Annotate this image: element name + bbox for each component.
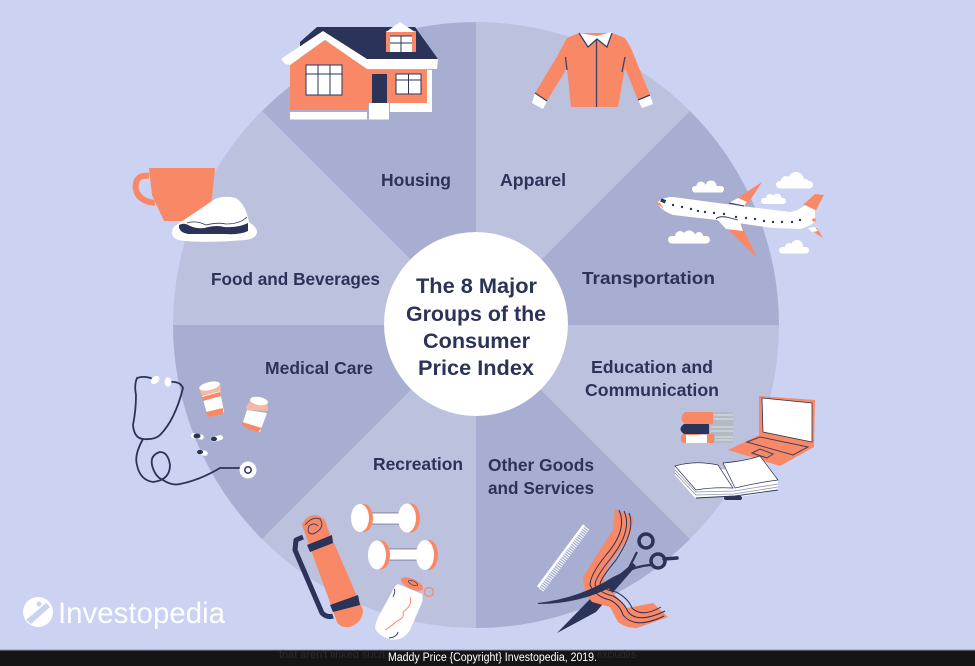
- label: Transportation: Transportation: [582, 268, 715, 288]
- icon: shirt: [532, 32, 653, 109]
- footer caption bar: [0, 649, 975, 666]
- icon: stethoscope chest piece: [240, 462, 256, 478]
- label: Food and Beverages: Food and Beverages: [211, 269, 380, 289]
- icon: stethoscope: [133, 376, 242, 484]
- centre circle with title: [384, 232, 568, 416]
- icon: hair strand and scissors: [538, 509, 677, 633]
- centre circle with title: Price Index: [418, 357, 534, 380]
- label: Medical Care: Medical Care: [265, 358, 373, 378]
- icon: coffee cup: [136, 168, 215, 221]
- label: Apparel: Apparel: [500, 170, 566, 190]
- icon: airplane with clouds: [655, 172, 824, 258]
- pie wheel of eight sectors: [173, 22, 779, 628]
- icon: slice of cake on plate: [172, 197, 257, 242]
- label: Other Goods and Services: and Services: [488, 478, 594, 498]
- icon: capsules: [191, 433, 224, 456]
- label: Housing: Housing: [381, 170, 451, 190]
- label: Recreation: Recreation: [373, 454, 463, 474]
- icon: laptop: [728, 396, 815, 466]
- centre circle with title: Consumer: [423, 330, 530, 353]
- icon: house: [281, 22, 438, 120]
- footer caption bar: Maddy Price {Copyright} Investopedia, 2019.: [388, 652, 597, 664]
- icon: open book: [675, 456, 778, 500]
- icon: yoga mat: [295, 515, 363, 627]
- label: Other Goods and Services: Other Goods: [488, 455, 594, 475]
- footer caption bar: that aren't linked such: [279, 649, 385, 661]
- label: Other Goods and Services: [488, 455, 594, 498]
- logo: Investopedia: Investopedia: [58, 597, 225, 630]
- footer caption bar: excludes: [597, 649, 636, 661]
- icon: water bottle: [375, 574, 434, 640]
- icon: dumbbells: [351, 504, 438, 570]
- label: Education and Communication: Communication: [585, 380, 719, 400]
- label: Education and Communication: Education and: [591, 357, 713, 377]
- centre circle with title: The 8 Major: [416, 275, 537, 298]
- centre circle with title: Groups of the: [406, 303, 546, 326]
- label: Education and Communication: [585, 357, 719, 400]
- icon: pill bottles: [198, 380, 269, 432]
- icon: comb: [538, 525, 587, 590]
- icon: stack of books: [680, 412, 733, 443]
